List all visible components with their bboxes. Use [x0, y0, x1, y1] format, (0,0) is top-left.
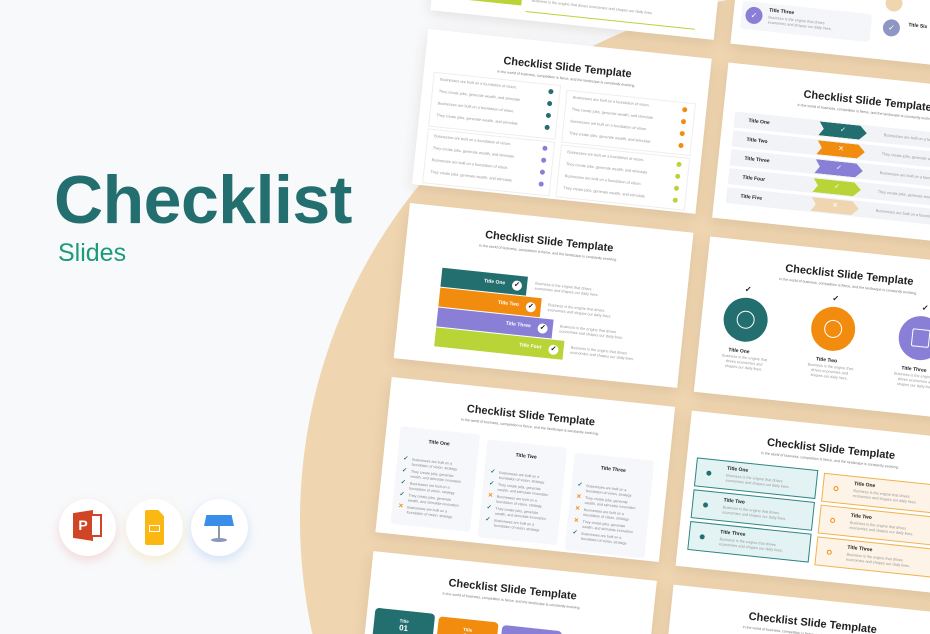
- panel: circles slide: Title One: [728, 347, 750, 355]
- panel: three-column slide: foundation of vision, strategy: [583, 512, 629, 521]
- panel: boxes slide: Title One: [727, 466, 748, 474]
- panel: two-column checklist slide: They create jobs, generate wealth, and stimulate: [436, 113, 518, 126]
- panel: top-right partial slide: ✓: [750, 11, 758, 20]
- panel: three-column slide: foundation of vision, strategy: [409, 486, 455, 495]
- panel: tabs slide: Title: [399, 618, 409, 624]
- panel: two-column checklist slide: Businesses are built on a foundation of vision.: [437, 101, 515, 113]
- panel: three-column slide: They create jobs, generate: [498, 483, 541, 491]
- panel: boxes slide: Business is the engine that drives: [719, 537, 776, 547]
- slides grid (rotated): [362, 0, 930, 634]
- panel: three-column slide: They create jobs, generate: [411, 470, 454, 478]
- panel: three-column slide: foundation of vision, strategy: [586, 488, 632, 497]
- icon row: app icons: [56, 504, 252, 564]
- panel: three-column slide: Businesses are built on a: [412, 458, 452, 466]
- panel: three-column slide: Businesses are built on a: [581, 532, 622, 540]
- panel: circles slide: Title Three: [901, 365, 927, 374]
- panel: three-column slide: Businesses are built on a: [407, 505, 447, 514]
- panel: three-column slide: ✓: [489, 481, 494, 487]
- panel: two-column checklist slide: Businesses are built on a foundation of vision.: [434, 134, 511, 146]
- panel: top-left partial slide: [430, 0, 730, 40]
- panel: boxes slide: Business is the engine that drives: [850, 521, 906, 531]
- panel: bars slide: economies and shapes our daily lives.: [570, 351, 634, 361]
- panel: bars slide: Business is the engine that drives: [571, 346, 627, 355]
- panel: three-column slide: ✕: [573, 518, 579, 524]
- panel: two-column checklist slide: They create jobs, generate wealth, and stimulate: [571, 107, 653, 120]
- panel: three-column slide: ✓: [490, 469, 496, 475]
- panel: boxes slide: Title Three: [720, 529, 746, 538]
- panel: chevron checklist slide: Title Four: [742, 175, 765, 183]
- panel: circles slide: ✓: [744, 284, 752, 294]
- panel: chevron checklist slide: Title Three: [744, 156, 770, 164]
- panel: two-column checklist slide: Businesses are built on a foundation of vision.: [567, 150, 644, 162]
- panel: circles slide: Checklist Slide Template: [785, 263, 914, 288]
- panel: two-column checklist slide: They create jobs, generate wealth, and stimulate: [430, 170, 512, 183]
- panel: top-right partial slide: [730, 0, 930, 73]
- panel: three-column slide: foundation of vision, strategy: [412, 462, 457, 471]
- panel: boxes slide: Title Two: [723, 497, 745, 506]
- icon: PowerPoint: [59, 499, 116, 556]
- background tan circle: [300, 0, 930, 634]
- icon: PowerPoint: P: [78, 517, 88, 533]
- panel: three-column slide: ✓: [577, 482, 583, 489]
- panel: top-right partial slide: economies and shapes our daily lives.: [768, 20, 832, 31]
- panel: three-column slide: Businesses are built on a: [494, 519, 534, 527]
- panel: three-column slide: wealth, and stimulate innovation: [408, 498, 459, 507]
- panel: chevron checklist slide: ✕: [838, 145, 844, 153]
- panel: tabs slide: Checklist Slide Template: [448, 577, 577, 603]
- panel: tabs slide: Title: [463, 627, 473, 633]
- panel: top-right partial slide: Business is the engine that drives: [768, 15, 825, 25]
- panel: chevron checklist slide: [712, 63, 930, 247]
- panel: circles slide: Business is the engine that drives economies and shapes our daily lives.: [722, 353, 767, 372]
- panel: three-column slide: Checklist Slide Template: [466, 403, 596, 429]
- panel: three-column slide: Businesses are built on a: [497, 495, 537, 503]
- panel: two-column checklist slide: Businesses are built on a foundation of vision.: [440, 77, 517, 90]
- panel: three-column slide: foundation of vision, strategy: [496, 499, 542, 508]
- panel: chevron checklist slide: ✓: [836, 164, 842, 172]
- panel: three-column slide: wealth, and stimulate innovation: [584, 500, 636, 510]
- panel: two-column checklist slide: Checklist Slide Template: [503, 55, 632, 80]
- panel: bars slide: Title Three: [505, 321, 531, 329]
- panel: three-column slide: Title One: [428, 439, 450, 447]
- panel: three-column slide: Businesses are built on a: [499, 471, 539, 479]
- panel: bars slide: economies and shapes our daily lives.: [535, 287, 599, 297]
- panel: three-column slide: ✓: [485, 517, 491, 523]
- panel: three-column slide: ✓: [572, 530, 578, 536]
- panel: circles slide: ✓: [921, 303, 929, 313]
- panel: three-column slide: ✓: [400, 480, 406, 486]
- panel: bars slide: ✓: [528, 302, 534, 310]
- panel: circles slide: Business is the engine that drives economies and shapes our daily lives.: [807, 362, 853, 381]
- panel: bars slide: Checklist Slide Template: [485, 229, 614, 254]
- panel: three-column slide: Businesses are built on a: [586, 484, 627, 492]
- panel: three-column slide: ✓: [403, 456, 409, 462]
- panel: boxes slide: economies and shapes our daily lives.: [722, 510, 786, 521]
- panel: boxes slide: economies and shapes our daily lives.: [846, 558, 910, 568]
- panel: three-column slide: ✓: [402, 468, 407, 474]
- panel: bars slide: economies and shapes our daily lives.: [547, 308, 612, 319]
- panel: three-column slide: In the world of business, competition is fierce, and the landscape is constantly evolving.: [461, 417, 599, 436]
- panel: chevron checklist slide: Title Two: [746, 137, 768, 145]
- panel: boxes slide: Title One: [854, 481, 876, 489]
- panel: three-column slide: ✕: [398, 503, 404, 510]
- panel: two-column checklist slide: They create jobs, generate wealth, and stimulate: [433, 146, 515, 159]
- icon: Google Slides: [126, 499, 183, 556]
- panel: bars slide: Title One: [484, 278, 505, 286]
- panel: bars slide: Business is the engine that drives: [560, 324, 616, 334]
- panel: chevron checklist slide: Checklist Slide Template: [803, 89, 930, 114]
- panel: boxes slide: Business is the engine that drives: [846, 553, 903, 562]
- panel: bars slide: ✓: [539, 324, 546, 331]
- panel: boxes slide: Business is the engine that drives: [853, 489, 910, 499]
- panel: three-column slide: They create jobs, generate: [585, 496, 628, 504]
- panel: bars slide: Title Two: [498, 300, 519, 308]
- panel: circles slide: [694, 237, 930, 421]
- panel: top-right partial slide: ✓: [888, 23, 895, 33]
- panel: chevron checklist slide: Title Five: [740, 194, 762, 202]
- panel: boxes slide: economies and shapes our daily lives.: [853, 494, 917, 505]
- panel: tabs slide: In the world of business, competition is fierce, and the landscape is constantly evolving.: [442, 592, 581, 610]
- panel: two-column checklist slide: Businesses are built on a foundation of vision.: [573, 95, 650, 108]
- title: Checklist: Checklist: [54, 162, 352, 238]
- panel: chevron checklist slide: ✓: [840, 127, 846, 134]
- panel: three-column slide: foundation of vision, strategy: [581, 536, 627, 545]
- panel: bars slide: [394, 203, 693, 388]
- panel: tabs slide: [357, 551, 657, 634]
- panel: chevron checklist slide: ✓: [834, 183, 840, 191]
- panel: three-column slide: ✕: [575, 506, 580, 512]
- panel: three-column slide: ✕: [488, 493, 493, 499]
- panel: bottom-right partial slide: [657, 585, 930, 634]
- panel: three-column slide: They create jobs, generate: [408, 493, 451, 502]
- subtitle: Slides: Slides: [58, 239, 126, 267]
- panel: boxes slide: Title Three: [847, 545, 873, 553]
- panel: boxes slide: [676, 411, 930, 596]
- panel: three-column slide: [375, 377, 675, 562]
- panel: two-column checklist slide: They create jobs, generate wealth, and stimulate: [439, 89, 520, 102]
- panel: bars slide: Business is the engine that drives: [535, 282, 592, 291]
- panel: circles slide: ✓: [832, 294, 840, 303]
- panel: bars slide: Title Four: [519, 342, 542, 351]
- panel: chevron checklist slide: Title One: [748, 118, 770, 126]
- panel: three-column slide: They create jobs, generate: [495, 507, 538, 515]
- panel: bars slide: economies and shapes our daily lives.: [559, 329, 623, 340]
- panel: three-column slide: wealth, and stimulate innovation: [495, 511, 546, 520]
- panel: three-column slide: foundation of vision, strategy: [494, 523, 540, 532]
- panel: circles slide: Title Two: [816, 356, 837, 364]
- panel: three-column slide: Title Three: [600, 465, 626, 474]
- panel: boxes slide: economies and shapes our daily lives.: [719, 542, 783, 553]
- panel: boxes slide: economies and shapes our daily lives.: [849, 526, 913, 536]
- panel: three-column slide: foundation of vision, strategy: [406, 510, 452, 519]
- panel: boxes slide: Title Two: [850, 513, 872, 521]
- panel: two-column checklist slide: [412, 29, 712, 214]
- panel: bars slide: ✓: [550, 345, 557, 353]
- panel: tabs slide: 01: [399, 623, 408, 633]
- panel: three-column slide: Businesses are built on a: [584, 508, 624, 516]
- panel: two-column checklist slide: They create jobs, generate wealth, and stimulate: [566, 162, 648, 175]
- panel: boxes slide: Business is the engine that drives: [726, 474, 783, 483]
- panel: two-column checklist slide: Businesses are built on a foundation of vision.: [570, 119, 647, 131]
- panel: top-right partial slide: Title Three: [769, 7, 794, 16]
- panel: bars slide: Business is the engine that drives: [548, 303, 605, 313]
- panel: three-column slide: ✓: [399, 492, 405, 498]
- panel: two-column checklist slide: They create jobs, generate wealth, and stimulate: [569, 131, 651, 144]
- panel: three-column slide: They create jobs, generate: [582, 520, 625, 528]
- panel: three-column slide: Title Two: [515, 452, 537, 461]
- panel: three-column slide: Businesses are built on a: [409, 482, 450, 490]
- panel: three-column slide: wealth, and stimulate innovation: [410, 474, 462, 483]
- panel: bars slide: In the world of business, competition is fierce, and the landscape is constantly evolving.: [479, 243, 617, 262]
- panel: top-right partial slide: Title Six: [908, 22, 928, 30]
- panel: three-column slide: ✕: [576, 494, 581, 500]
- panel: two-column checklist slide: Businesses are built on a foundation of vision.: [431, 158, 509, 170]
- panel: boxes slide: In the world of business, competition is fierce, and the landscape is constantly evolving.: [761, 451, 899, 470]
- panel: three-column slide: ✓: [486, 505, 492, 511]
- panel: two-column checklist slide: Businesses are built on a foundation of vision.: [564, 174, 642, 186]
- icon: Keynote: [191, 499, 248, 556]
- panel: two-column checklist slide: In the world of business, competition is fierce, and the landscape is constantly evolving.: [497, 69, 636, 88]
- panel: three-column slide: wealth, and stimulate innovation: [582, 524, 633, 534]
- panel: chevron checklist slide: ✕: [832, 202, 838, 210]
- panel: three-column slide: wealth, and stimulate innovation: [497, 487, 549, 497]
- panel: boxes slide: Business is the engine that drives: [723, 505, 779, 515]
- panel: boxes slide: economies and shapes our daily lives.: [726, 479, 790, 489]
- panel: circles slide: In the world of business, competition is fierce, and the landscape is constantly evolving.: [779, 277, 917, 296]
- panel: boxes slide: Checklist Slide Template: [766, 437, 896, 462]
- panel: three-column slide: foundation of vision, strategy: [499, 475, 545, 484]
- panel: two-column checklist slide: They create jobs, generate wealth, and stimulate: [563, 186, 645, 199]
- panel: bars slide: ✓: [514, 281, 520, 288]
